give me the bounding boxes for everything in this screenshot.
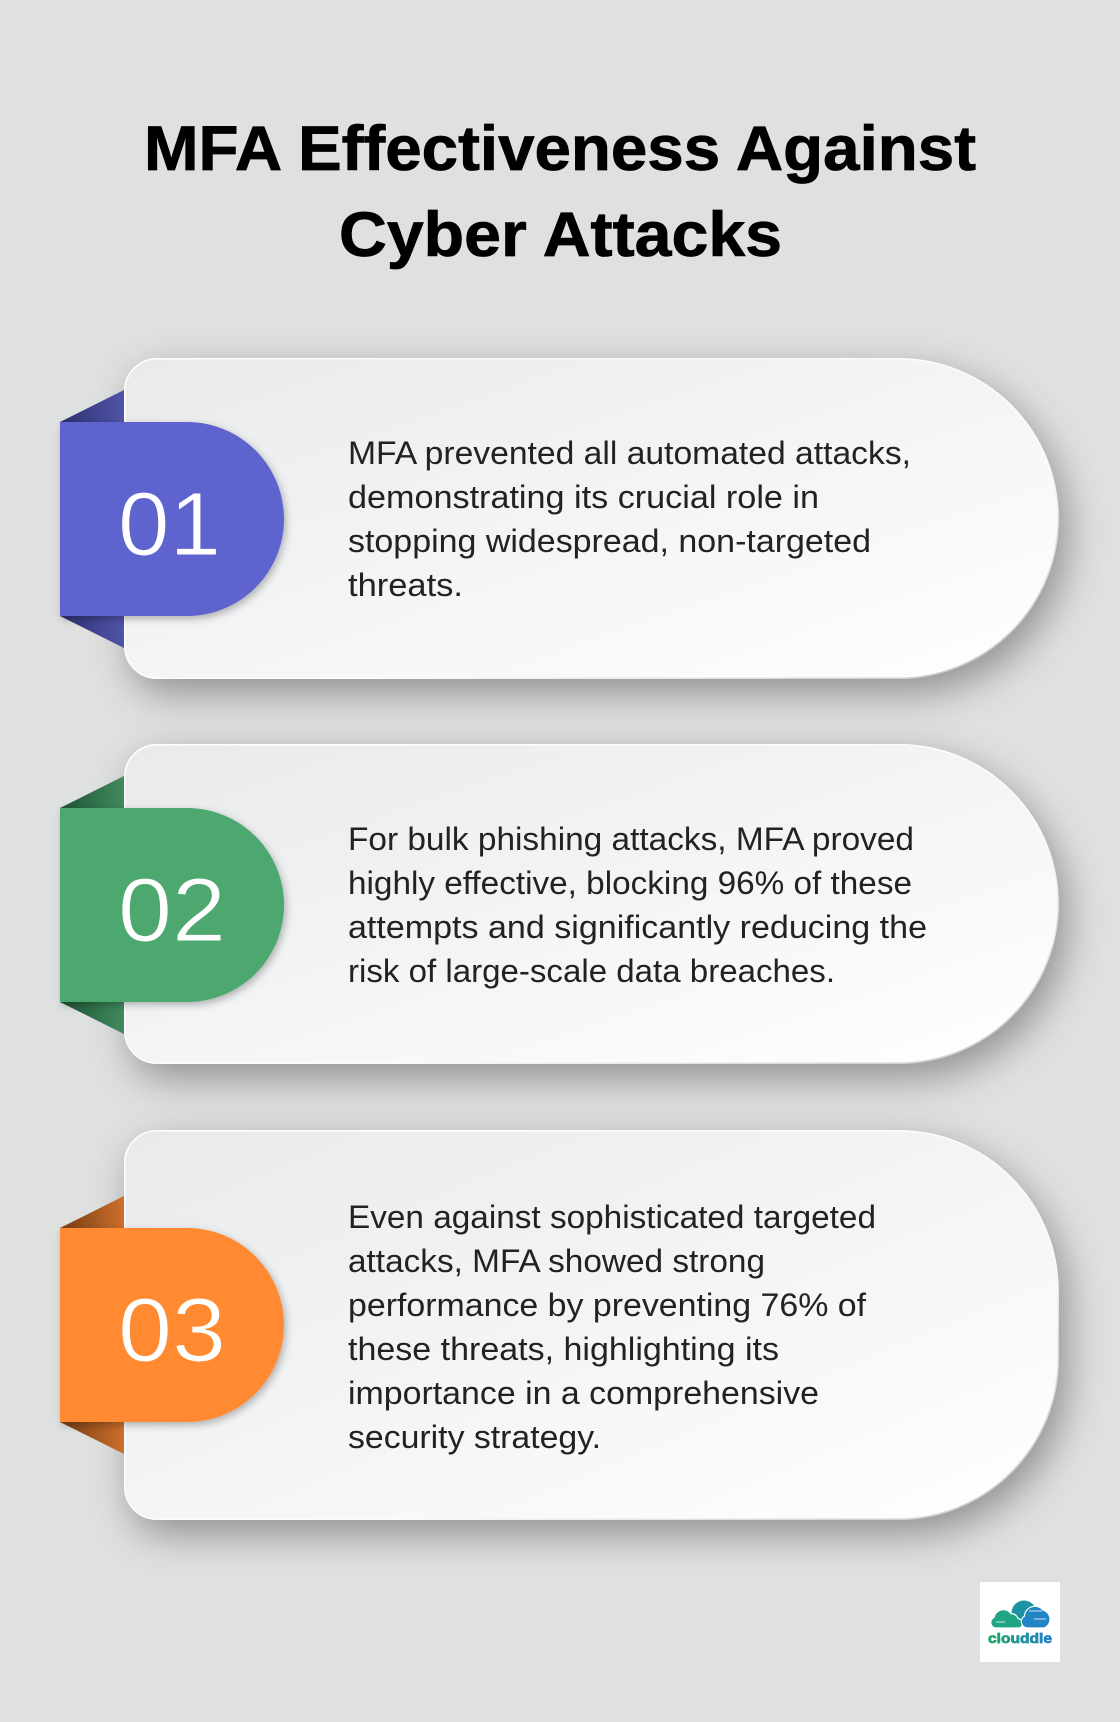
title bbox=[144, 114, 976, 270]
text 03 bbox=[348, 1199, 876, 1455]
text 03: Even against sophisticated targeted bbox=[348, 1199, 876, 1235]
panel: step 01 bbox=[60, 359, 1058, 678]
logo: clouddle bbox=[980, 1582, 1060, 1662]
text 03: attacks, MFA showed strong bbox=[348, 1243, 765, 1279]
text 03: performance by preventing 76% of bbox=[348, 1287, 866, 1323]
number badge 03 bbox=[60, 1228, 284, 1422]
title: Cyber Attacks bbox=[339, 200, 782, 270]
card 03 bbox=[125, 1131, 1058, 1519]
text 02: For bulk phishing attacks, MFA proved bbox=[348, 821, 914, 857]
panel: step 02 bbox=[60, 745, 1058, 1063]
ribbon fold bottom 01 bbox=[60, 616, 124, 648]
text 03: security strategy. bbox=[348, 1419, 601, 1455]
ribbon fold top 03 bbox=[60, 1196, 124, 1228]
number 01: 01 bbox=[118, 475, 221, 575]
number badge 02 bbox=[60, 808, 284, 1002]
text 01: stopping widespread, non-targeted bbox=[348, 523, 871, 559]
number badge 01 bbox=[60, 422, 284, 616]
text 02: attempts and significantly reducing the bbox=[348, 909, 927, 945]
icon: clouds bbox=[991, 1600, 1050, 1628]
text 01: demonstrating its crucial role in bbox=[348, 479, 819, 515]
ribbon fold bottom 02 bbox=[60, 1002, 124, 1034]
text 03: importance in a comprehensive bbox=[348, 1375, 819, 1411]
text 02: risk of large-scale data breaches. bbox=[348, 953, 835, 989]
text 01 bbox=[348, 435, 911, 603]
text 02 bbox=[348, 821, 927, 989]
wordmark: clouddle bbox=[988, 1630, 1052, 1646]
text 02: highly effective, blocking 96% of these bbox=[348, 865, 912, 901]
panel: step 03 bbox=[60, 1131, 1058, 1519]
text 03: these threats, highlighting its bbox=[348, 1331, 779, 1367]
ribbon fold bottom 03 bbox=[60, 1422, 124, 1454]
ribbon fold top 01 bbox=[60, 390, 124, 422]
ribbon fold top 02 bbox=[60, 776, 124, 808]
title: MFA Effectiveness Against bbox=[144, 114, 976, 184]
text 01: threats. bbox=[348, 567, 463, 603]
text 01: MFA prevented all automated attacks, bbox=[348, 435, 911, 471]
card 02 bbox=[125, 745, 1058, 1063]
number 02: 02 bbox=[118, 861, 226, 961]
card 01 bbox=[125, 359, 1058, 678]
number 03: 03 bbox=[118, 1281, 226, 1381]
